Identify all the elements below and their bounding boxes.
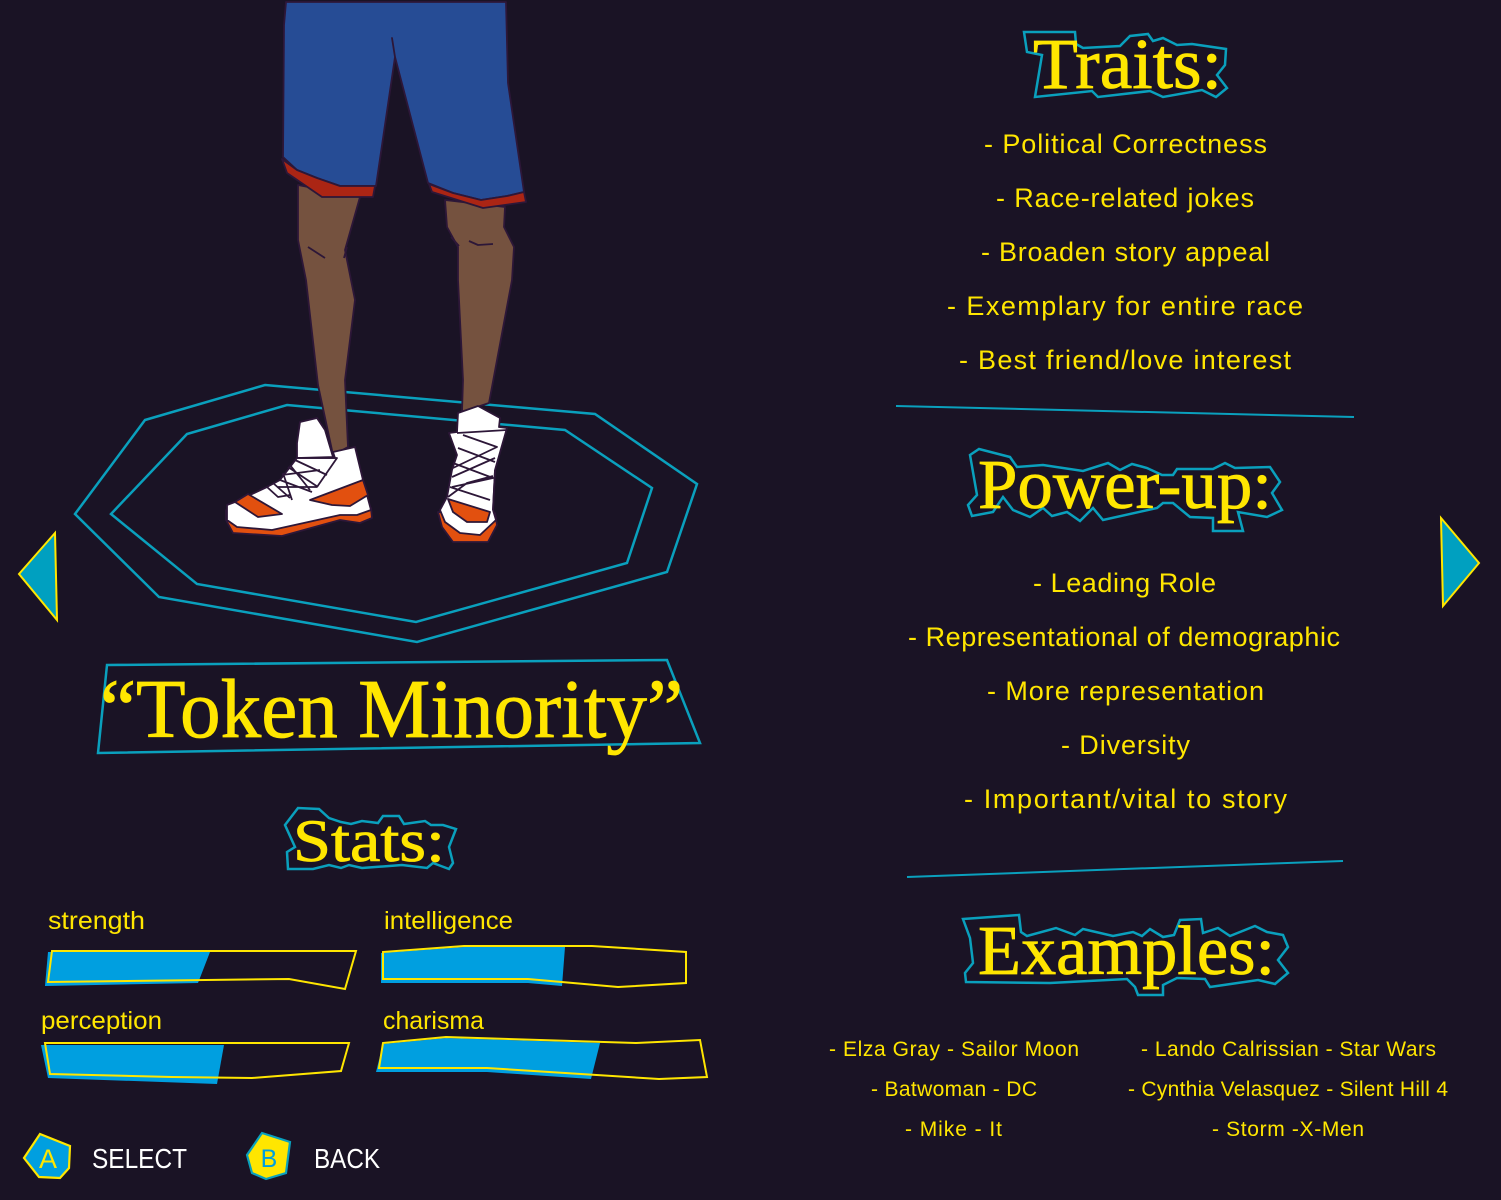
left leg (298, 185, 360, 455)
list: examples: - Storm -X-Men (1212, 1118, 1364, 1141)
heading: Stats: Stats: (293, 808, 445, 874)
shorts (283, 2, 524, 200)
button: B back (247, 1133, 380, 1179)
list: traits: - Best friend/love interest (959, 345, 1291, 375)
button: A select: SELECT (92, 1143, 187, 1174)
left shoe (226, 418, 372, 536)
right leg (445, 200, 514, 412)
list: traits: - Political Correctness (984, 129, 1267, 159)
list: traits (947, 129, 1303, 375)
stat: intelligence (381, 907, 686, 987)
heading: Examples: Examples: (978, 913, 1275, 990)
list: examples: - Cynthia Velasquez - Silent Hill 4 (1128, 1078, 1448, 1101)
stat: strength (45, 907, 356, 989)
list: traits: - Broaden story appeal (981, 237, 1270, 267)
stat: intelligence: intelligence (384, 907, 513, 935)
character legs and shoes (226, 2, 526, 542)
stat: perception: perception (41, 1007, 162, 1035)
stat: perception (41, 1007, 349, 1084)
button: A select (24, 1134, 187, 1178)
list: traits: - Race-related jokes (996, 183, 1254, 213)
list: examples: - Lando Calrissian - Star Wars (1141, 1038, 1436, 1061)
list: power-ups: - More representation (987, 676, 1264, 706)
list: power-ups: - Important/vital to story (964, 784, 1288, 814)
arrow: previous (19, 533, 57, 620)
heading: Traits: Traits: (1033, 24, 1222, 104)
button: B back: B (261, 1145, 277, 1173)
button: A select: A (39, 1144, 57, 1174)
list: power-ups (908, 568, 1340, 814)
list: power-ups: - Diversity (1061, 730, 1190, 760)
icon: octagonal platform (75, 385, 697, 642)
heading: Power-up: Power-up: (978, 447, 1272, 524)
arrow: next (1441, 518, 1479, 606)
list: power-ups: - Leading Role (1033, 568, 1216, 598)
list: examples: - Elza Gray - Sailor Moon (829, 1038, 1079, 1061)
list: traits: - Exemplary for entire race (947, 291, 1303, 321)
list: examples: - Batwoman - DC (871, 1078, 1037, 1101)
title: Token Minority: “Token Minority” (100, 663, 683, 756)
right shoe (438, 406, 507, 542)
stat: charisma (376, 1007, 707, 1079)
list: examples (829, 1038, 1448, 1141)
knee creases (308, 237, 493, 258)
button: B back: BACK (314, 1143, 380, 1174)
shorts trim: right (429, 184, 526, 208)
stat: charisma: charisma (383, 1007, 484, 1035)
stat: strength: strength (48, 907, 145, 935)
shorts trim: left (282, 159, 375, 197)
list: examples: - Mike - It (905, 1118, 1002, 1141)
list: power-ups: - Representational of demographic (908, 622, 1340, 652)
